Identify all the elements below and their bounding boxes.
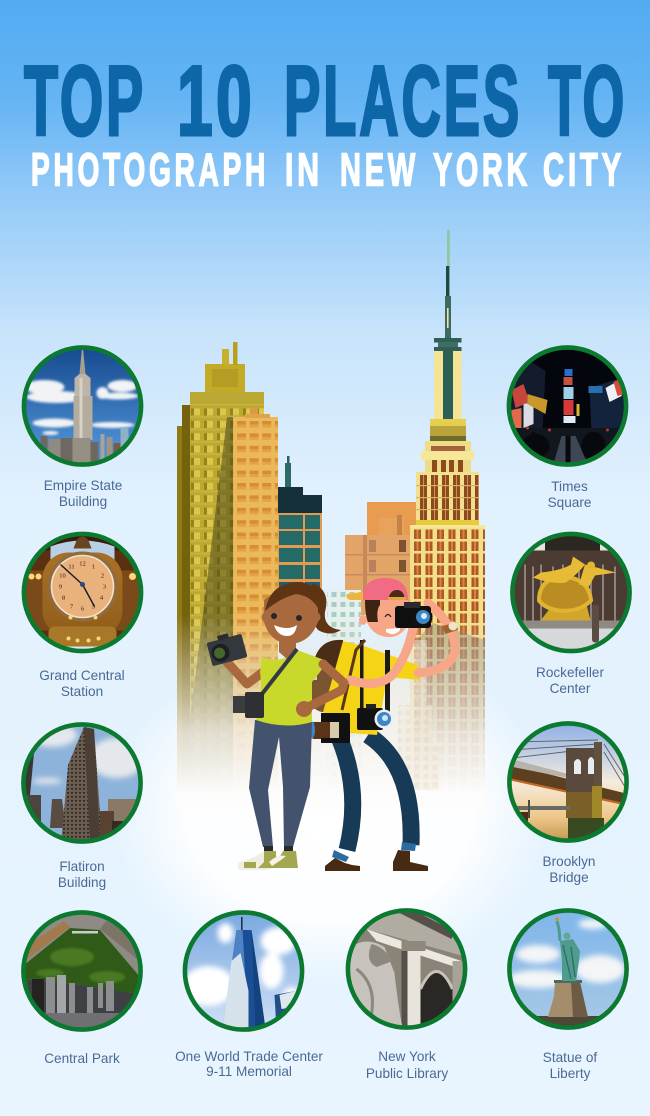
grand central clock scene: 1	[92, 564, 95, 570]
label: one world trade center: One World Trade Center	[175, 1049, 323, 1064]
title	[24, 45, 627, 196]
label: times square: Square	[548, 495, 591, 510]
man's boots	[325, 850, 428, 871]
statue of liberty ring	[509, 910, 627, 1028]
label: new york public library: New York	[378, 1049, 436, 1064]
label: brooklyn bridge: Bridge	[549, 870, 589, 885]
photo: statue of liberty	[507, 908, 629, 1030]
woman's head	[262, 582, 320, 644]
rockefeller ring	[512, 534, 630, 651]
grand central clock scene: 7	[70, 604, 74, 610]
heading: top 10 places to	[24, 45, 627, 156]
subheading: photograph in new york city: NEW	[340, 144, 419, 196]
grand central clock scene: 9	[59, 584, 62, 590]
woman's hand on hip	[296, 701, 312, 717]
man's cuffs	[332, 842, 416, 862]
woman's left arm	[218, 652, 263, 684]
woman's hand	[209, 644, 223, 658]
empire state ring	[24, 347, 141, 465]
photo: brooklyn bridge	[507, 721, 629, 843]
label: grand central station: Grand Central	[39, 668, 125, 683]
label: central park: Central Park	[44, 1051, 120, 1066]
label: times square: Times	[551, 479, 588, 494]
rockefeller scene	[514, 536, 628, 649]
times square ring	[509, 347, 626, 465]
flatiron ring	[23, 724, 141, 842]
grand central clock scene	[26, 536, 139, 649]
white glow behind characters	[110, 640, 550, 980]
label: rockefeller center: Center	[550, 681, 591, 696]
woman's jeans	[249, 720, 312, 847]
woman's socks	[264, 846, 293, 852]
grand central clock scene: 12	[79, 560, 86, 568]
woman's camera strap	[262, 649, 297, 694]
fade of the skyline to white	[177, 600, 485, 809]
woman's neck	[279, 636, 296, 660]
building: gold tower	[177, 342, 264, 806]
label: one world trade center: 9-11 Memorial	[206, 1064, 292, 1079]
label: flatiron building: Building	[58, 875, 106, 890]
building: pale background tower	[327, 590, 361, 790]
grand central ring	[24, 534, 141, 651]
watch	[443, 622, 458, 634]
flatiron scene	[26, 726, 138, 840]
central park scene	[26, 914, 138, 1028]
photo: empire state building	[22, 345, 144, 467]
man's other arm	[418, 603, 455, 673]
one world trade center ring	[185, 912, 302, 1030]
camera held by man	[395, 602, 432, 628]
man's jeans	[338, 735, 411, 850]
subheading: photograph in new york city: YORK	[433, 144, 531, 196]
woman's shoes	[238, 851, 298, 870]
pale foreground buildings	[398, 640, 439, 790]
grand central clock scene: 8	[62, 594, 65, 602]
central park ring	[23, 912, 141, 1030]
grand central clock scene: 5	[92, 604, 95, 610]
label: statue of liberty: Statue of	[543, 1050, 597, 1065]
grand central clock scene: 6	[81, 606, 85, 612]
grand central clock scene: 4	[100, 594, 104, 602]
man's pink cap	[346, 578, 408, 600]
photo: grand central station	[22, 532, 144, 654]
label: flatiron building: Flatiron	[59, 859, 105, 874]
grand central clock scene: 2	[101, 572, 104, 580]
building: orange tower	[233, 408, 278, 806]
man's head	[359, 600, 408, 637]
man's arm raised to camera	[350, 622, 414, 684]
building: teal tower	[278, 456, 322, 613]
label: empire state building: Empire State	[44, 478, 122, 493]
man's neck strap and backpack strap	[342, 640, 390, 720]
man's shirt	[323, 641, 420, 735]
woman's side camera	[233, 692, 264, 718]
label: rockefeller center: Rockefeller	[536, 665, 604, 680]
character: woman with cameras	[205, 582, 344, 870]
building: peach block	[345, 502, 417, 615]
brooklyn bridge ring	[509, 723, 627, 841]
photo: new york public library	[346, 907, 468, 1030]
photo: times square	[506, 345, 628, 467]
label: new york public library: Public Library	[366, 1066, 448, 1081]
heading: top 10 places to: TOP	[24, 45, 146, 156]
woman's ponytail	[310, 583, 341, 634]
library ring	[348, 910, 465, 1028]
subheading: photograph in new york city: PHOTOGRAPH	[31, 144, 269, 196]
woman's shirt	[256, 650, 327, 726]
photo: central park	[21, 910, 143, 1032]
building: empire state tower	[410, 230, 485, 806]
statue of liberty scene	[512, 912, 624, 1026]
large lens camera	[309, 713, 350, 743]
backpack	[307, 640, 343, 712]
heading: top 10 places to: 10	[177, 45, 255, 156]
chest camera	[357, 704, 394, 730]
empire state scene	[26, 350, 139, 462]
library scene	[350, 912, 463, 1026]
photo: one world trade center	[182, 910, 304, 1032]
label: grand central station: Station	[61, 684, 103, 699]
grand central clock scene: 3	[103, 584, 106, 590]
character: man with cameras	[307, 578, 458, 871]
illustrated skyline	[177, 230, 485, 809]
one world trade center scene	[187, 914, 300, 1028]
subheading: photograph in new york city	[31, 144, 625, 196]
shadow on lower tower	[416, 623, 485, 806]
photo: rockefeller center	[510, 532, 632, 654]
subheading: photograph in new york city: IN	[285, 144, 323, 196]
woman's held camera	[205, 630, 247, 666]
photo: flatiron building	[21, 722, 145, 844]
woman's right arm	[306, 664, 344, 708]
label: brooklyn bridge: Brooklyn	[543, 854, 595, 869]
label: empire state building: Building	[59, 494, 107, 509]
times square scene	[511, 350, 624, 462]
label: statue of liberty: Liberty	[550, 1066, 591, 1081]
grand central clock scene: 11	[68, 564, 75, 570]
brooklyn bridge scene	[512, 726, 624, 838]
grand central clock scene: 10	[59, 572, 66, 580]
